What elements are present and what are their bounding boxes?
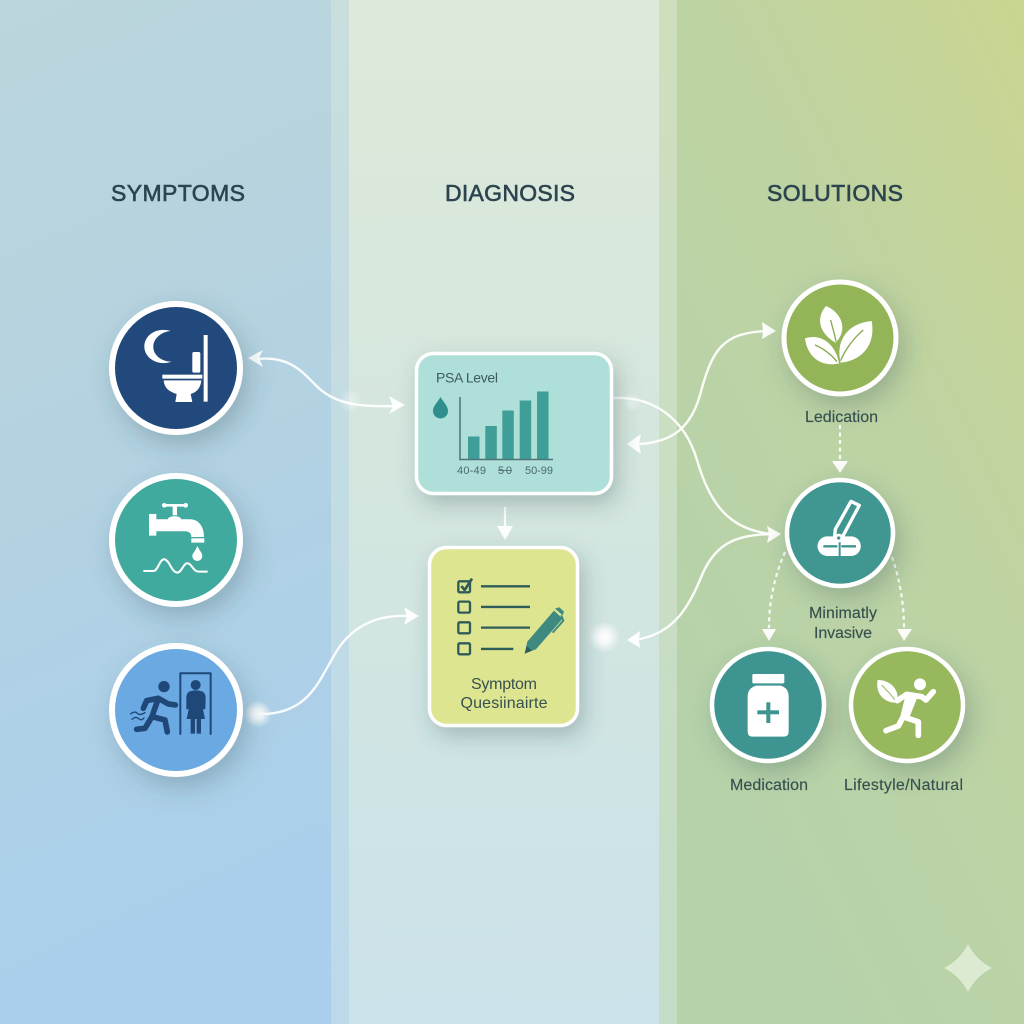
label: Minimally Invasive: Minimatly	[809, 605, 877, 622]
icon circle: natural leaves	[784, 282, 896, 394]
panel: diagnosis column	[349, 0, 659, 1024]
arrow: dashed to medication	[762, 552, 785, 641]
arrow: PSA card down to questionnaire	[497, 507, 513, 540]
icon: surgical tool	[817, 501, 861, 556]
bar chart: 40-49	[457, 465, 486, 477]
icon circle: medication	[712, 649, 824, 761]
label: Ledication: Ledication	[805, 409, 878, 426]
icon circle: urgency	[112, 646, 240, 774]
arrow: dashed to lifestyle	[892, 557, 912, 641]
panel: symptoms column	[0, 0, 331, 1024]
icon: faucet with wave	[143, 503, 208, 573]
card: PSA level	[416, 354, 612, 494]
panel: solutions column	[677, 0, 1024, 1024]
label: Lifestyle/Natural: Lifestyle/Natural	[844, 777, 963, 794]
icon: moon and toilet	[144, 330, 208, 402]
label: Minimally Invasive: Invasive	[814, 625, 872, 642]
label: Medication: Medication	[730, 777, 808, 794]
icon: three leaves	[805, 306, 872, 364]
card: symptom questionnaire: Quesiinairte	[460, 695, 548, 712]
icon circle: lifestyle	[851, 649, 963, 761]
heading: diagnosis: DIAGNOSIS	[445, 180, 575, 206]
icon: pen	[525, 607, 564, 654]
arrow: PSA card to minimally invasive	[613, 392, 772, 534]
arrow: symptom three to questionnaire	[244, 607, 419, 728]
icon: running to restroom	[131, 673, 211, 734]
arrow: minimally invasive to questionnaire glow	[588, 526, 781, 653]
bar chart	[457, 392, 553, 477]
icon: blood drop	[433, 397, 448, 419]
arrow: symptom one to PSA card	[248, 350, 405, 414]
card: symptom questionnaire	[430, 548, 578, 726]
heading: solutions: SOLUTIONS	[767, 180, 903, 206]
icon circle: minimally invasive	[787, 480, 893, 586]
arrow: dashed leaf to minimally invasive	[832, 425, 848, 473]
label: symptom questionnaire: Symptom	[471, 676, 537, 693]
bar chart: 50	[498, 465, 512, 477]
label: Minimally Invasive	[809, 605, 877, 642]
icon circle: weak stream	[112, 476, 240, 604]
arrow: PSA card and leaf circle	[627, 322, 776, 454]
icon circle: nocturia	[112, 304, 240, 432]
icon: sparkle	[944, 944, 992, 992]
icon: pill bottle	[748, 674, 789, 737]
icon: checklist	[458, 579, 530, 654]
label: PSA Level: PSA Level	[436, 370, 498, 386]
heading: symptoms: SYMPTOMS	[111, 180, 245, 206]
bar chart: 50-99	[525, 465, 553, 477]
icon: runner with leaf	[877, 678, 933, 735]
